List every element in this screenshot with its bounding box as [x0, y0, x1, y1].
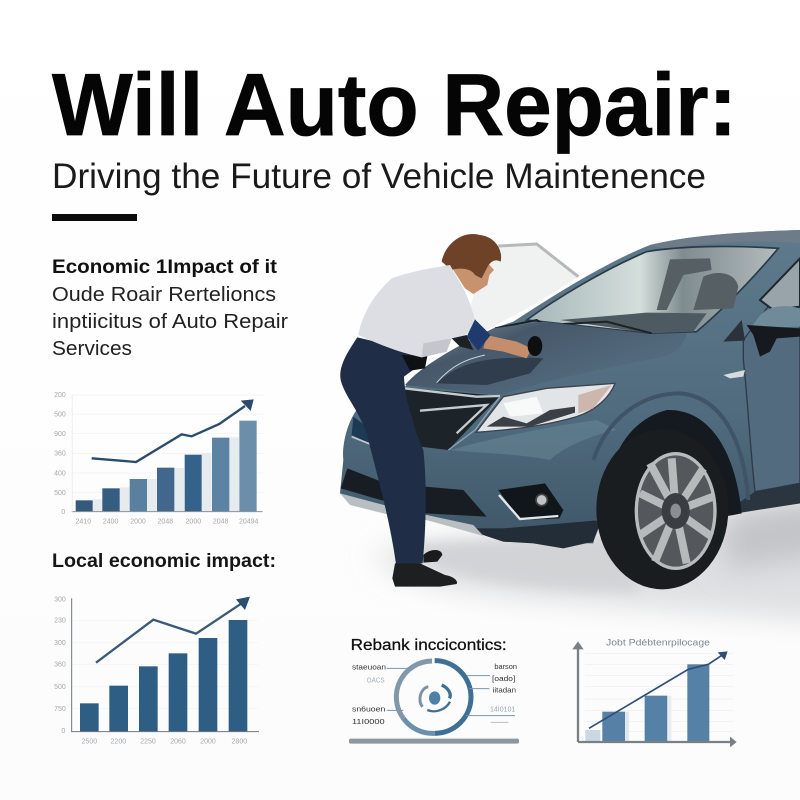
- heading: local economic impact: Local economic impact:: [52, 551, 276, 572]
- text block: economic impact: [52, 257, 288, 360]
- donut centre icon: [420, 685, 450, 711]
- seats: [657, 258, 738, 310]
- chart: economic impact bars with trend arrow: [54, 392, 263, 525]
- bumper highlight: [450, 420, 617, 460]
- arch lip highlight: [593, 393, 748, 500]
- text body: inptiicitus of Auto Repair: [52, 311, 288, 333]
- chart: economic impact bars with trend arrow: 900: [54, 431, 66, 438]
- roof edge: [650, 230, 800, 248]
- chart: local economic impact bars with trend arrow: 300: [54, 640, 66, 647]
- headlight: [476, 383, 615, 432]
- chart: economic impact bars with trend arrow: 0: [61, 509, 65, 516]
- donut right labels: barson: [494, 662, 517, 671]
- donut right labels: [oado]: [492, 674, 515, 683]
- wipers: [495, 320, 652, 333]
- chart: local economic impact bars with trend arrow: 2250: [140, 739, 156, 746]
- hood reflection: [437, 358, 543, 385]
- donut right labels: iitadan: [493, 685, 516, 694]
- donut right labels: 14I0101: [490, 704, 515, 713]
- chart: economic impact bars with trend arrow: 20494: [239, 518, 258, 525]
- side sill: [733, 483, 800, 513]
- mechanic: neck and face: [453, 262, 494, 294]
- donut right labels: [490, 662, 517, 713]
- chart: economic impact bars with trend arrow: 500: [54, 411, 66, 418]
- chart: local economic impact bars with trend arrow: 2000: [200, 739, 216, 746]
- mechanic: forearm: [483, 335, 532, 358]
- chart: economic impact bars with trend arrow: 2000: [186, 518, 201, 525]
- chart: local economic impact bars with trend arrow: 230: [54, 618, 66, 625]
- fog lamp housing: [498, 483, 563, 520]
- title: Will Auto Repair:: [52, 55, 737, 154]
- illustration: car and mechanic: [340, 230, 800, 589]
- chart: economic impact bars with trend arrow: 2048: [158, 518, 173, 525]
- chart: local economic impact bars with trend arrow: 300: [54, 597, 66, 604]
- chart label: Jobt Pdébtenrpilocage: [606, 638, 710, 648]
- chart: local economic impact bars with trend arrow: 0: [61, 728, 65, 735]
- left bumper opening: [352, 417, 377, 447]
- subtitle: Driving the Future of Vehicle Maintenence: [52, 157, 706, 196]
- dashboard shadow: [560, 313, 707, 333]
- donut chart: [396, 661, 471, 733]
- mechanic: rear shoe: [423, 550, 442, 563]
- lower grille right: [425, 487, 487, 517]
- rim: [636, 454, 715, 568]
- chart: economic impact bars with trend arrow: 360: [54, 451, 66, 458]
- lower bumper: [477, 520, 602, 548]
- panel: rebank metrics donut: [349, 637, 519, 744]
- donut left labels: staeuoan: [352, 662, 386, 671]
- hood surface: [405, 322, 687, 395]
- car body: [340, 230, 800, 543]
- side window: [760, 258, 800, 310]
- chart: economic impact bars with trend arrow: 200: [54, 392, 66, 399]
- mechanic: shirt: [358, 265, 477, 357]
- polishing pad: [528, 336, 542, 356]
- donut base bar: [349, 739, 519, 744]
- text body: Oude Roair Rertelioncs: [52, 284, 276, 306]
- chart: economic impact bars with trend arrow: 2000: [130, 518, 146, 525]
- grille: [404, 388, 500, 450]
- illustration: ground shadow: [372, 495, 800, 625]
- side door: [743, 263, 800, 492]
- chart: economic impact bars with trend arrow: 500: [54, 490, 66, 497]
- text heading: Economic 1Impact of it: [52, 257, 278, 278]
- fog lamp: [536, 494, 547, 506]
- chart: job percentage bars with arrow: [572, 638, 737, 747]
- chart: local economic impact bars with trend arrow: 500: [54, 684, 66, 691]
- chart: economic impact bars with trend arrow: 2400: [103, 518, 119, 525]
- front splitter: [340, 493, 483, 536]
- mechanic: front shoe: [392, 563, 457, 587]
- lower grille left: [341, 468, 390, 503]
- wheel arch: [605, 410, 742, 537]
- text body: Services: [52, 338, 132, 360]
- donut leader lines: [387, 668, 515, 716]
- mechanic: hair: [442, 234, 501, 278]
- mechanic: inner arm: [452, 335, 473, 350]
- open hood panel: [467, 244, 578, 330]
- donut left labels: sn6uoen: [352, 705, 385, 714]
- donut left labels: OACS: [367, 675, 385, 684]
- tyre: [596, 429, 728, 589]
- chart: local economic impact bars with trend arrow: 2800: [232, 739, 247, 746]
- mechanic: belt pouch: [402, 355, 427, 371]
- donut left labels: [352, 662, 386, 726]
- chart: economic impact bars with trend arrow: 2410: [76, 518, 91, 525]
- chart: local economic impact bars with trend arrow: 2060: [170, 739, 186, 746]
- chart: local economic impact bars with trend arrow: 750: [54, 706, 66, 713]
- donut heading: Rebank inccicontics:: [351, 637, 507, 654]
- chart: local economic impact bars with trend arrow: 2500: [82, 739, 97, 746]
- mechanic: arm band: [467, 319, 491, 351]
- chart: economic impact bars with trend arrow: 400: [54, 470, 66, 477]
- door handle trim: [723, 370, 745, 378]
- chart: local economic impact bars with trend arrow: 2200: [111, 739, 126, 746]
- donut left labels: 11I0000: [352, 717, 385, 726]
- heading rule: [52, 214, 137, 221]
- chart: local economic impact bars with trend arrow: 360: [54, 662, 66, 669]
- mechanic: trousers: [340, 337, 427, 564]
- wing mirror: [723, 306, 800, 357]
- chart: economic impact bars with trend arrow: 2048: [213, 518, 229, 525]
- chart: local economic impact bars with trend arrow: [54, 597, 259, 746]
- windshield: [527, 246, 778, 333]
- shirt shade: [422, 338, 452, 357]
